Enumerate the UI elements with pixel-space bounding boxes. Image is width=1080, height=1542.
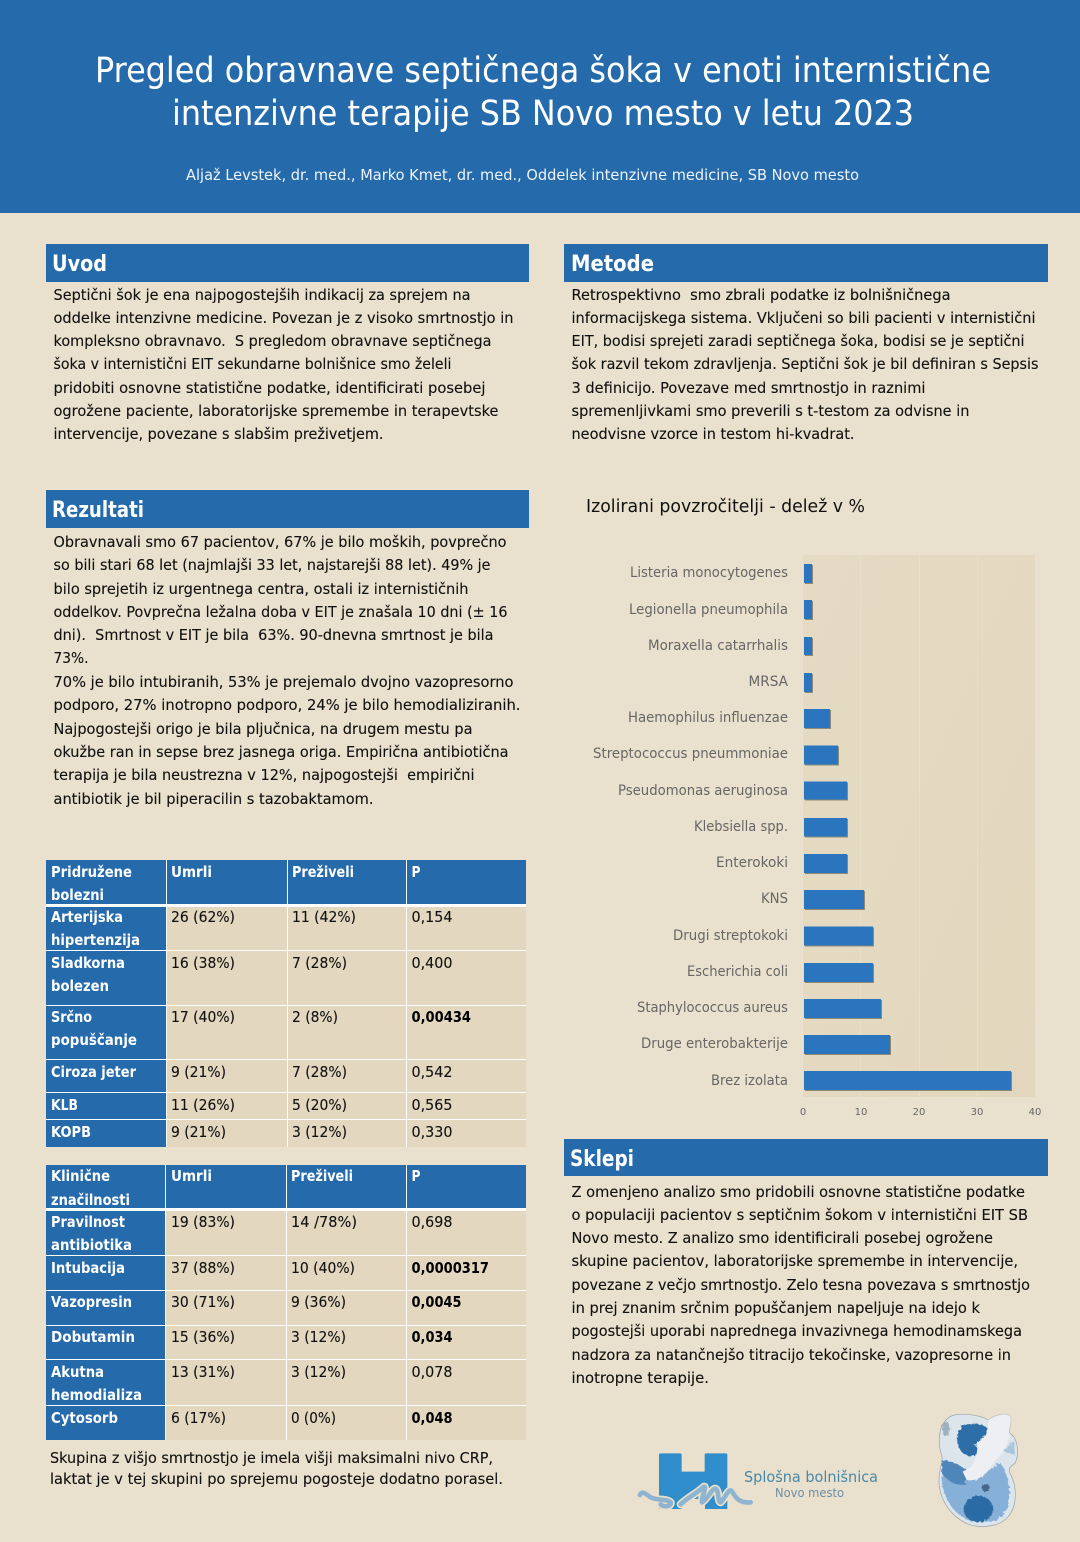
row: Cytosorb: 0,048 bbox=[412, 1409, 452, 1427]
row: Ciroza jeter: Ciroza jeter bbox=[51, 1063, 137, 1081]
row: Srčno popuščanje: Srčno bbox=[51, 1008, 92, 1026]
row: Cytosorb: 0 (0%) bbox=[291, 1409, 336, 1427]
row: Intubacija bbox=[46, 1256, 526, 1290]
category labels: Legionella pneumophila bbox=[629, 602, 788, 618]
row: Pravilnost antibiotika: antibiotika bbox=[51, 1236, 132, 1254]
table header row: Preživeli bbox=[291, 1167, 353, 1185]
row: KLB bbox=[46, 1093, 526, 1119]
row: Dobutamin: Dobutamin bbox=[51, 1328, 135, 1346]
bar chart: isolated pathogens bbox=[593, 555, 1041, 1118]
row: Pravilnost antibiotika: 19 (83%) bbox=[171, 1213, 235, 1231]
category labels: Drugi streptokoki bbox=[673, 928, 788, 944]
heading: Metode bbox=[564, 244, 1048, 282]
text: Rezultati: so bili stari 68 let (najmlajši 33 let, najstarejši 88 let). 49% je bbox=[54, 556, 490, 574]
text: Sklepi bbox=[572, 1183, 1030, 1387]
text: Rezultati: 73%. bbox=[54, 649, 88, 667]
row: Ciroza jeter: 7 (28%) bbox=[292, 1063, 347, 1081]
text: Sklepi: inotropne terapije. bbox=[572, 1369, 709, 1387]
category labels bbox=[593, 565, 788, 1089]
row: Akutna hemodializa: Akutna bbox=[51, 1363, 104, 1381]
icon: H with waves bbox=[640, 1453, 751, 1509]
category labels: Listeria monocytogenes bbox=[630, 565, 788, 581]
logo text: Splošna bolnišnica bbox=[744, 1468, 878, 1486]
row: KOPB: KOPB bbox=[51, 1123, 91, 1141]
row: Akutna hemodializa bbox=[46, 1360, 526, 1405]
text: Metode bbox=[572, 286, 1039, 443]
row: Pravilnost antibiotika: Pravilnost bbox=[51, 1213, 125, 1231]
table header row: značilnosti bbox=[51, 1191, 130, 1209]
row: Vazopresin: 30 (71%) bbox=[171, 1293, 235, 1311]
row: Cytosorb: Cytosorb bbox=[51, 1409, 118, 1427]
heading: Metode: Metode bbox=[571, 252, 654, 277]
note below table: laktat je v tej skupini po sprejemu pogosteje dodatno porasel. bbox=[50, 1470, 503, 1488]
text: Uvod: ogrožene paciente, laboratorijske spremembe in terapevtske bbox=[54, 402, 498, 420]
text: Metode: Retrospektivno smo zbrali podatke iz bolnišničnega bbox=[572, 286, 950, 304]
heading: Rezultati: Rezultati bbox=[52, 498, 144, 523]
table header row: Klinične bbox=[51, 1167, 110, 1185]
heading: Sklepi bbox=[564, 1139, 1048, 1176]
table: Pridružene bolezni bbox=[46, 860, 526, 1147]
text: Uvod: oddelke intenzivne medicine. Povezan je z visoko smrtnostjo in bbox=[54, 309, 514, 327]
table header row: Umrli bbox=[171, 863, 212, 881]
logo text bbox=[744, 1468, 878, 1500]
table header row: bolezni bbox=[51, 886, 104, 904]
row: Akutna hemodializa: 13 (31%) bbox=[171, 1363, 235, 1381]
text: Rezultati: bilo sprejetih iz urgentnega centra, ostali iz internističnih bbox=[54, 580, 468, 598]
row: KOPB bbox=[46, 1120, 526, 1147]
row: Srčno popuščanje: popuščanje bbox=[51, 1031, 137, 1049]
row: Arterijska hipertenzija: 26 (62%) bbox=[171, 908, 235, 926]
row: Cytosorb bbox=[46, 1406, 526, 1440]
row: Sladkorna bolezen: 0,400 bbox=[412, 954, 452, 972]
authors: Aljaž Levstek, dr. med., Marko Kmet, dr. med., Oddelek intenzivne medicine, SB Novo mesto bbox=[186, 166, 859, 184]
row: KOPB: 0,330 bbox=[412, 1123, 452, 1141]
text: Uvod: kompleksno obravnavo. S pregledom obravnave septičnega bbox=[54, 332, 492, 350]
category labels: Staphylococcus aureus bbox=[637, 1000, 788, 1016]
text: Uvod: intervencije, povezane s slabšim preživetjem. bbox=[54, 425, 384, 443]
heading: Uvod: Uvod bbox=[52, 252, 107, 277]
text: Uvod: pridobiti osnovne statistične podatke, identificirati posebej bbox=[54, 379, 486, 397]
text: Sklepi: in prej znanim srčnim popuščanjem napeljuje na idejo k bbox=[572, 1299, 980, 1317]
heading: Sklepi: Sklepi bbox=[570, 1147, 634, 1172]
category labels: Brez izolata bbox=[711, 1073, 788, 1089]
panel: Rezultati bbox=[46, 490, 529, 808]
row: Sladkorna bolezen: bolezen bbox=[51, 977, 109, 995]
chart title: Izolirani povzročitelji - delež v % bbox=[586, 496, 865, 517]
x axis labels: 20 bbox=[913, 1107, 925, 1118]
row: Arterijska hipertenzija: Arterijska bbox=[51, 908, 123, 926]
table header row bbox=[46, 860, 526, 904]
row: Dobutamin bbox=[46, 1326, 526, 1359]
category labels: Klebsiella spp. bbox=[694, 819, 788, 835]
heading: Uvod bbox=[46, 244, 529, 282]
title bbox=[95, 51, 991, 134]
logo text: Novo mesto bbox=[775, 1486, 844, 1500]
row: Sladkorna bolezen: 16 (38%) bbox=[171, 954, 235, 972]
text: Sklepi: Z omenjeno analizo smo pridobili osnovne statistične podatke bbox=[572, 1183, 1025, 1201]
row: KOPB: 3 (12%) bbox=[292, 1123, 347, 1141]
text: Uvod: Septični šok je ena najpogostejših indikacij za sprejem na bbox=[54, 286, 470, 304]
text: Rezultati: oddelkov. Povprečna ležalna doba v EIT je znašala 10 dni (± 16 bbox=[54, 603, 508, 621]
bars bbox=[804, 564, 1012, 1091]
text: Uvod bbox=[54, 286, 514, 443]
table: Klinične značilnosti bbox=[46, 1165, 526, 1440]
text: Metode: EIT, bodisi sprejeti zaradi septičnega šoka, bodisi se je septični bbox=[572, 332, 1024, 350]
category labels: KNS bbox=[761, 891, 788, 907]
row: Dobutamin: 0,034 bbox=[412, 1328, 452, 1346]
text: Metode: šok razvil tekom zdravljenja. Septični šok je bil definiran s Sepsis bbox=[572, 355, 1039, 373]
row: Vazopresin bbox=[46, 1291, 526, 1325]
table header row: Pridružene bbox=[51, 863, 132, 881]
row: KLB: 0,565 bbox=[412, 1096, 452, 1114]
row: Pravilnost antibiotika bbox=[46, 1211, 526, 1255]
x axis labels bbox=[800, 1107, 1041, 1118]
table header row bbox=[46, 1165, 526, 1209]
category labels: Streptococcus pneummoniae bbox=[593, 746, 788, 762]
text: Rezultati: okužbe ran in sepse brez jasnega origa. Empirična antibiotična bbox=[54, 743, 508, 761]
note below table: Skupina z višjo smrtnostjo je imela višji maksimalni nivo CRP, bbox=[50, 1449, 493, 1467]
logo: Splošna bolnišnica Novo mesto bbox=[640, 1453, 878, 1509]
row: Akutna hemodializa: 3 (12%) bbox=[291, 1363, 346, 1381]
x axis labels: 30 bbox=[971, 1107, 983, 1118]
row: Akutna hemodializa: 0,078 bbox=[412, 1363, 452, 1381]
x axis labels: 10 bbox=[855, 1107, 867, 1118]
row: KOPB: 9 (21%) bbox=[171, 1123, 226, 1141]
text: Rezultati: Obravnavali smo 67 pacientov, 67% je bilo moških, povprečno bbox=[54, 533, 506, 551]
row: Arterijska hipertenzija: 0,154 bbox=[412, 908, 452, 926]
text: Rezultati: 70% je bilo intubiranih, 53% je prejemalo dvojno vazopresorno bbox=[54, 673, 514, 691]
panel: Uvod bbox=[46, 244, 529, 443]
category labels: Pseudomonas aeruginosa bbox=[618, 783, 788, 799]
text: Sklepi: o populaciji pacientov s septičnim šokom v internistični EIT SB bbox=[572, 1206, 1028, 1224]
logo: bird emblem bbox=[939, 1414, 1018, 1526]
table header row: Umrli bbox=[171, 1167, 212, 1185]
row: Arterijska hipertenzija: hipertenzija bbox=[51, 931, 140, 949]
text: Rezultati: Najpogostejši origo je bila pljučnica, na drugem mestu pa bbox=[54, 720, 472, 738]
panel: Metode bbox=[564, 244, 1048, 443]
row: Cytosorb: 6 (17%) bbox=[171, 1409, 226, 1427]
row: Intubacija: Intubacija bbox=[51, 1259, 125, 1277]
text: Metode: neodvisne vzorce in testom hi-kvadrat. bbox=[572, 425, 854, 443]
row: Dobutamin: 3 (12%) bbox=[291, 1328, 346, 1346]
text: Metode: 3 definicijo. Povezave med smrtnostjo in raznimi bbox=[572, 379, 926, 397]
category labels: Haemophilus influenzae bbox=[628, 710, 788, 726]
text: Metode: spremenljivkami smo preverili s t-testom za odvisne in bbox=[572, 402, 970, 420]
row: Srčno popuščanje bbox=[46, 1006, 526, 1059]
row: Intubacija: 0,0000317 bbox=[412, 1259, 489, 1277]
text: Rezultati: terapija je bila neustrezna v 12%, najpogostejši empirični bbox=[54, 766, 474, 784]
row: Dobutamin: 15 (36%) bbox=[171, 1328, 235, 1346]
plot area bbox=[803, 555, 1035, 1097]
category labels: Enterokoki bbox=[716, 855, 788, 871]
category labels: MRSA bbox=[748, 674, 788, 690]
row: Ciroza jeter bbox=[46, 1060, 526, 1092]
row: Arterijska hipertenzija: 11 (42%) bbox=[292, 908, 356, 926]
title: Pregled obravnave septičnega šoka v enoti internistične bbox=[95, 51, 991, 91]
row: Sladkorna bolezen: Sladkorna bbox=[51, 954, 125, 972]
row: Srčno popuščanje: 2 (8%) bbox=[292, 1008, 338, 1026]
row: Akutna hemodializa: hemodializa bbox=[51, 1386, 142, 1404]
row: Intubacija: 10 (40%) bbox=[291, 1259, 355, 1277]
text: Rezultati: dni). Smrtnost v EIT je bila 63%. 90-dnevna smrtnost je bila bbox=[54, 626, 494, 644]
row: Sladkorna bolezen bbox=[46, 951, 526, 1005]
text: Rezultati bbox=[54, 533, 520, 808]
row: KLB: 11 (26%) bbox=[171, 1096, 235, 1114]
text: Rezultati: antibiotik je bil piperacilin s tazobaktamom. bbox=[54, 790, 374, 808]
heading: Rezultati bbox=[46, 490, 529, 528]
text: Metode: informacijskega sistema. Vključeni so bili pacienti v internistični bbox=[572, 309, 1036, 327]
category labels: Moraxella catarrhalis bbox=[648, 638, 788, 654]
row: Vazopresin: 9 (36%) bbox=[291, 1293, 346, 1311]
table header row: P bbox=[412, 863, 420, 881]
panel: Sklepi bbox=[564, 1139, 1048, 1387]
text: Sklepi: Novo mesto. Z analizo smo identificirali posebej ogrožene bbox=[572, 1229, 993, 1247]
text: Sklepi: povezane z večjo smrtnostjo. Zelo tesna povezava s smrtnostjo bbox=[572, 1276, 1030, 1294]
text: Uvod: šoka v internistični EIT sekundarne bolnišnice smo želeli bbox=[54, 355, 452, 373]
title: intenzivne terapije SB Novo mesto v letu 2023 bbox=[172, 94, 914, 134]
table header row: Preživeli bbox=[292, 863, 354, 881]
row: Pravilnost antibiotika: 14 /78%) bbox=[291, 1213, 357, 1231]
text: Rezultati: podporo, 27% inotropno podporo, 24% je bilo hemodializiranih. bbox=[54, 696, 520, 714]
row: Sladkorna bolezen: 7 (28%) bbox=[292, 954, 347, 972]
row: Ciroza jeter: 9 (21%) bbox=[171, 1063, 226, 1081]
row: Srčno popuščanje: 0,00434 bbox=[412, 1008, 471, 1026]
category labels: Druge enterobakterije bbox=[641, 1036, 788, 1052]
text: Sklepi: nadzora za natančnejšo titracijo tekočinske, vazopresorne in bbox=[572, 1346, 1011, 1364]
x axis labels: 0 bbox=[800, 1107, 806, 1118]
row: KLB: KLB bbox=[51, 1096, 78, 1114]
table header row: P bbox=[412, 1167, 420, 1185]
row: Ciroza jeter: 0,542 bbox=[412, 1063, 452, 1081]
text: Sklepi: skupine pacientov, laboratorijske spremembe in intervencije, bbox=[572, 1252, 1018, 1270]
x axis labels: 40 bbox=[1029, 1107, 1041, 1118]
row: Arterijska hipertenzija bbox=[46, 907, 526, 950]
row: Pravilnost antibiotika: 0,698 bbox=[412, 1213, 452, 1231]
text: Sklepi: pogostejši uporabi naprednega invazivnega hemodinamskega bbox=[572, 1322, 1022, 1340]
row: Vazopresin: 0,0045 bbox=[412, 1293, 462, 1311]
row: Intubacija: 37 (88%) bbox=[171, 1259, 235, 1277]
category labels: Escherichia coli bbox=[687, 964, 788, 980]
row: Srčno popuščanje: 17 (40%) bbox=[171, 1008, 235, 1026]
row: KLB: 5 (20%) bbox=[292, 1096, 347, 1114]
row: Vazopresin: Vazopresin bbox=[51, 1293, 132, 1311]
header banner bbox=[0, 0, 1080, 213]
note below table bbox=[50, 1449, 503, 1488]
